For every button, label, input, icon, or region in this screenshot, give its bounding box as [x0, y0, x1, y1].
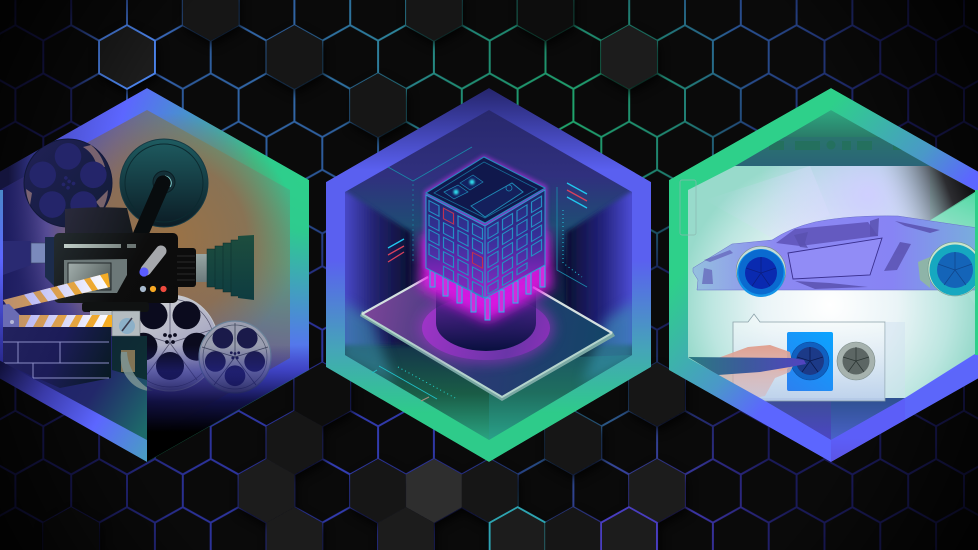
lower-left shaded wall [16, 336, 147, 440]
floor circuit lines [372, 366, 457, 401]
hand [700, 345, 795, 398]
building support legs [430, 265, 545, 320]
accent lines right [567, 183, 587, 208]
platform deck [360, 275, 615, 401]
building glow [420, 229, 552, 322]
circuit line upper left [388, 147, 472, 264]
roof plate [471, 183, 523, 217]
glowing disc [418, 292, 554, 364]
bottom seam wall [760, 358, 978, 462]
left ghost panel [680, 180, 696, 235]
left wall [340, 188, 411, 345]
stylus [688, 357, 806, 375]
eyepiece [3, 237, 55, 287]
left face windows [429, 201, 482, 297]
right wall [566, 188, 637, 345]
roof fans [444, 175, 483, 199]
panel: data center cube [326, 88, 651, 462]
accent lines left [388, 239, 404, 262]
camera handle arm [139, 183, 163, 238]
interior backdrop [345, 110, 632, 440]
white stage [688, 166, 978, 398]
building right face [485, 190, 545, 298]
focus knob [175, 248, 196, 287]
dark corner [880, 166, 978, 224]
clapper hinge [3, 304, 20, 327]
lavender light [735, 166, 930, 300]
clapper top stick [3, 273, 110, 310]
tripod head [90, 311, 153, 391]
hexagon frame band [326, 88, 651, 462]
circuit lines right [557, 187, 587, 287]
lower-right wall light [582, 300, 637, 385]
lavender triangle [705, 166, 830, 238]
right-lower fade to black [147, 348, 309, 462]
car body [693, 216, 978, 290]
left vertical strip [0, 190, 3, 362]
rear bumper [918, 257, 930, 288]
unselected wheel [837, 342, 875, 380]
right face windows [488, 196, 542, 294]
slider control [139, 251, 161, 277]
thin edge line [147, 370, 309, 462]
indicator lights [140, 286, 167, 292]
back film reel [24, 138, 112, 228]
clapper lower stick [19, 315, 112, 327]
front wheel [736, 246, 786, 297]
large silver reel [140, 295, 216, 392]
front film reel [120, 139, 208, 227]
viewfinder screen [64, 259, 127, 293]
hexagon frame band [669, 88, 978, 462]
frame bottom tip [831, 398, 905, 462]
panel: film camera [0, 88, 320, 470]
frame right strip [975, 190, 978, 355]
top toolbar wall [735, 110, 930, 166]
mint wall [924, 190, 978, 310]
camera base [82, 302, 149, 312]
side walls [340, 188, 637, 440]
right floor tint [489, 355, 632, 440]
dark central column [436, 290, 536, 351]
frame bottom-left band [669, 358, 831, 462]
wheel picker card [733, 314, 905, 401]
clapper board [0, 327, 111, 388]
panel: car configurator [669, 88, 978, 462]
car details [702, 218, 940, 289]
car door [788, 238, 882, 279]
lens assembly [196, 235, 254, 300]
camera body [54, 233, 178, 303]
building left face [426, 195, 485, 298]
camera top housing [65, 207, 133, 233]
selected wheel tile [787, 332, 833, 391]
lower-left wall light [340, 300, 395, 385]
small silver reel [199, 321, 271, 393]
raised lighter hexagons [43, 0, 685, 550]
rear wheel [928, 242, 978, 296]
car windows [776, 222, 878, 246]
interior backdrop [0, 110, 290, 398]
lower-left frame band [0, 352, 147, 462]
building roof [426, 157, 545, 223]
hexagon frame band [0, 88, 309, 462]
